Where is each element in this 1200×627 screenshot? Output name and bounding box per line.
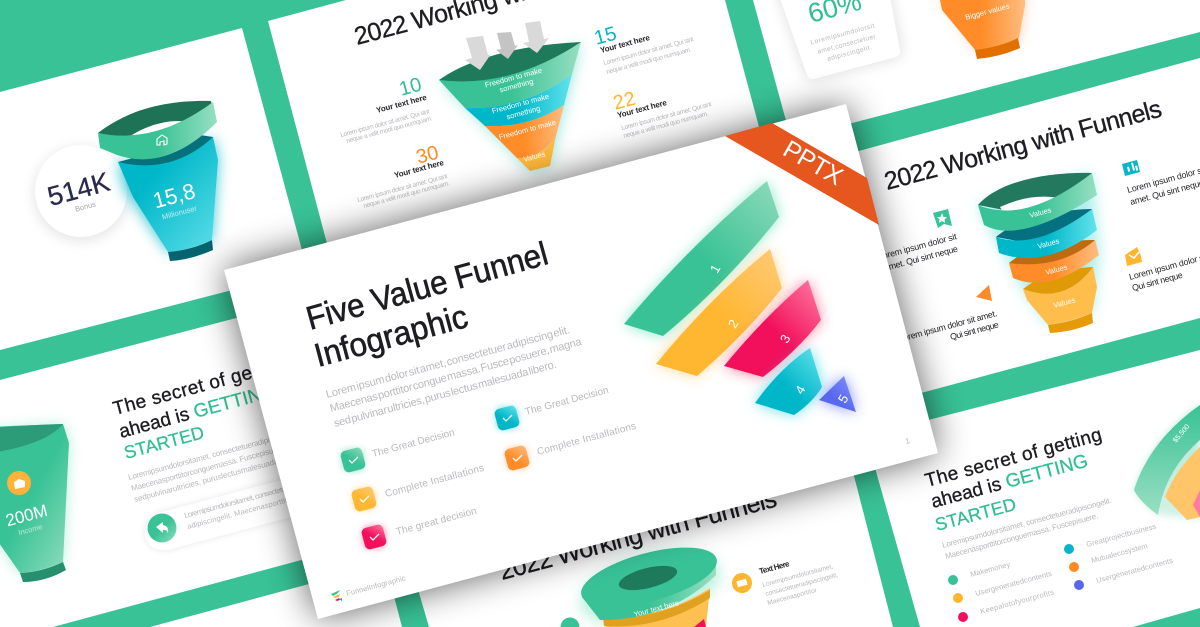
panel: main slide — [224, 104, 938, 619]
segment 2 — [656, 249, 782, 376]
stat 22: 22 — [611, 88, 638, 115]
check item: red: The great decision — [395, 506, 478, 538]
panel: slide bottom center — [405, 445, 893, 627]
icon: envelope badge — [1125, 247, 1142, 266]
list of bullets: Makemoney — [969, 560, 1011, 579]
icon: back arrow — [156, 522, 168, 533]
icon: orange arrow badge — [976, 285, 992, 301]
stat 30: neque a velit modi quo numquam. — [363, 180, 451, 210]
main slide shadow — [224, 104, 938, 619]
funnel ring: green — [978, 173, 1097, 231]
stat 10: 10 — [397, 74, 424, 101]
stat 30: 30 — [414, 142, 441, 169]
heading: STARTED — [122, 422, 206, 463]
body text: sed pulvinar ultricies, purus lectus malesuada libero. — [333, 359, 558, 430]
text block: left bottom: Qui sint neque — [949, 319, 1000, 342]
stat 30 — [357, 142, 451, 210]
text block: Maecenasportitor — [767, 587, 819, 607]
text block: consectetueradipiscingelit, — [765, 572, 839, 598]
icon: envelope circle — [7, 471, 31, 495]
check item: orange — [504, 421, 637, 471]
funnel with layered values: Freedom to make — [498, 118, 557, 142]
callout pill: Loremipsumdolorsitamet, consectetuer — [183, 483, 292, 520]
text block: right top — [1126, 164, 1200, 207]
stacked funnel — [978, 173, 1099, 333]
check item: teal — [494, 385, 610, 431]
panel: slide top left — [0, 28, 302, 350]
stat 22: Lorem ipsum dolor sit amet. Qui sint — [621, 101, 712, 132]
stat 10 — [340, 74, 434, 145]
segment 4 — [755, 348, 822, 415]
heading: ahead is GETTING — [117, 381, 278, 443]
text block: left top: Lorem ipsum dolor sit — [877, 231, 958, 262]
title: Infographic — [310, 297, 471, 374]
panel: slide top right — [753, 0, 1200, 139]
funnel ring: orange: Values — [1044, 262, 1069, 277]
funnel ring: teal — [996, 209, 1097, 258]
funnel — [572, 536, 728, 627]
stat card 60%: adipiscingelit. — [826, 44, 873, 63]
heading: ahead is GETTING — [929, 451, 1090, 513]
funnel: teal body and green ring — [98, 101, 218, 261]
list of bullets — [948, 522, 1174, 622]
body text: Maecenas porttitor congue massa. Fusce posuere, magna — [329, 336, 584, 415]
footer logo — [331, 590, 342, 601]
funnel: partial cropped — [1134, 405, 1200, 520]
stat 15: Lorem ipsum dolor sit amet. Qui sint — [603, 36, 694, 67]
text block: Text Here — [758, 559, 791, 576]
funnel: teal body and green ring: Millionuser — [161, 203, 198, 222]
icon: star bookmark — [933, 209, 952, 228]
funnel: green income: 200M — [4, 501, 50, 530]
heading: 2022 Working with Funnels — [496, 485, 780, 586]
title: Five Value Funnel — [302, 235, 552, 337]
arrow: right — [523, 21, 549, 53]
text block: left bottom: Lorem ipsum dolor sit amet. — [898, 308, 998, 344]
stat card 60%: Loremipsumdolorsit — [810, 23, 876, 46]
list of bullets: Usergeneratedcontents — [1095, 556, 1174, 585]
funnel ring: orange — [1009, 240, 1099, 283]
funnel with layered values: Freedom to make — [491, 92, 550, 116]
heading: STARTED — [933, 494, 1018, 535]
stat 30: Your text here — [393, 158, 445, 180]
panel: slide bottom right — [866, 350, 1200, 627]
stat 10: Your text here — [375, 93, 428, 115]
heading — [923, 424, 1104, 535]
arrow: left — [465, 36, 491, 70]
funnel ring: teal: Values — [1036, 236, 1061, 251]
heading: The secret of getting — [923, 424, 1104, 492]
heading — [111, 353, 291, 463]
stat 15 — [592, 23, 694, 76]
stat 22 — [611, 88, 712, 140]
panel: slide bottom left corner — [150, 581, 402, 627]
stat card 60%: amet,consectetuer — [817, 33, 877, 56]
banner: PPTX ribbon — [725, 123, 879, 225]
check item: yellow: Complete Installations — [384, 463, 485, 500]
check item: green — [340, 427, 456, 473]
stat 15: 15 — [592, 23, 619, 50]
callout pill: adipiscingelit. Maecenasporttitor — [186, 494, 295, 531]
text block: left top: amet. Qui sint neque — [883, 244, 959, 273]
segment 4: 4 — [792, 383, 808, 397]
page number: 1 — [904, 436, 911, 446]
funnel with layered values: Values — [522, 149, 547, 164]
text block: Loremipsumdolorsitamet, consectetueradipiscingelit. — [941, 496, 1113, 550]
list of bullets: Mutualecosystem — [1090, 541, 1149, 565]
text block: Maecenasporttitorconguemassa. Fuscepisuere. — [944, 511, 1099, 561]
icon: house — [157, 135, 167, 145]
funnel: green income: Income — [17, 522, 43, 537]
funnel: green income — [0, 424, 69, 582]
list of bullets: Usergeneratedcontents — [974, 569, 1053, 598]
check item: yellow — [351, 463, 485, 512]
text block: Maecenasporttitorconguemassa. Fuscepisuere, magna — [130, 436, 312, 493]
banner: PPTX ribbon: PPTX — [778, 135, 848, 191]
funnel with layered values: Freedom to make — [484, 66, 543, 90]
stat 10: Lorem ipsum dolor sit amet. Qui sint — [340, 108, 431, 139]
check item: orange: Complete Installations — [536, 421, 637, 458]
stat 22: neque a velit modi quo numquam. — [623, 110, 710, 140]
segment 1: 1 — [707, 262, 723, 276]
funnel body — [1023, 267, 1097, 333]
footer label: FunnelInfographic — [345, 573, 407, 598]
icon: green circle — [560, 618, 580, 627]
stat circle — [35, 145, 127, 240]
title — [302, 235, 552, 374]
funnel: teal body and green ring: 15,8 — [150, 178, 198, 213]
check item: green: The Great Decision — [371, 427, 456, 460]
stat 15: Your text here — [599, 33, 651, 55]
list of bullets: Greatprojectbusiness — [1085, 522, 1157, 549]
heading: The secret of getting — [111, 353, 291, 420]
segment 5: 5 — [835, 392, 851, 406]
text block: Loremipsumdolorsitamet, — [762, 563, 834, 589]
list of bullets: Keepalotofyourprofits — [979, 588, 1055, 616]
funnel ring: green: Values — [1028, 205, 1053, 220]
segment 5 — [819, 376, 856, 412]
funnel: orange — [938, 0, 1025, 59]
funnel: orange: Bigger values — [964, 1, 1011, 22]
check item: teal: The Great Decision — [524, 385, 610, 418]
panel: slide top center — [268, 0, 762, 255]
segment 3: 3 — [777, 332, 793, 346]
segment 2: 2 — [725, 317, 741, 331]
panel: slide left middle — [0, 317, 320, 627]
funnel body: Values — [1052, 295, 1077, 310]
panel: slide right — [800, 58, 1200, 404]
funnel with layered values: something — [498, 77, 534, 94]
stat 30: Lorem ipsum dolor sit amet. Qui sint — [357, 173, 448, 204]
stat 10: neque a velit modi quo numquam. — [346, 115, 434, 145]
stat circle: 514K — [44, 167, 113, 212]
text block: Loremipsumdolorsitamet, consectetueradipiscingelit. — [127, 428, 299, 482]
funnel with layered values — [439, 42, 581, 171]
icon: printer circle — [732, 573, 752, 593]
arrow: middle — [496, 32, 518, 59]
funnel: Your text here — [633, 598, 680, 619]
funnel segments — [624, 181, 856, 415]
callout pill — [145, 475, 310, 550]
stat card 60% — [770, 0, 902, 80]
funnel: partial cropped: $5,500 — [1172, 423, 1191, 444]
text block: sedpulvinarultricies, puruslectusmalesuadalibero. — [133, 451, 300, 504]
segment 3 — [724, 280, 821, 377]
stat circle: Bonus — [74, 199, 97, 214]
funnel with layered values: something — [505, 104, 541, 121]
segment 1 — [624, 181, 779, 336]
stat 15: neque a velit modi quo numquam. — [606, 46, 693, 76]
icon: bar chart badge — [1122, 160, 1140, 176]
text block: right bottom: Qui sint neque — [1131, 270, 1184, 293]
text block — [758, 559, 839, 607]
body text: Lorem ipsum dolor sit amet, consectetuer adipiscing elit. — [325, 324, 571, 401]
stat 22: Your text here — [616, 98, 668, 120]
heading: 2022 Working with Funnels — [881, 95, 1165, 196]
check item: red — [361, 506, 478, 550]
checklist — [340, 385, 637, 550]
